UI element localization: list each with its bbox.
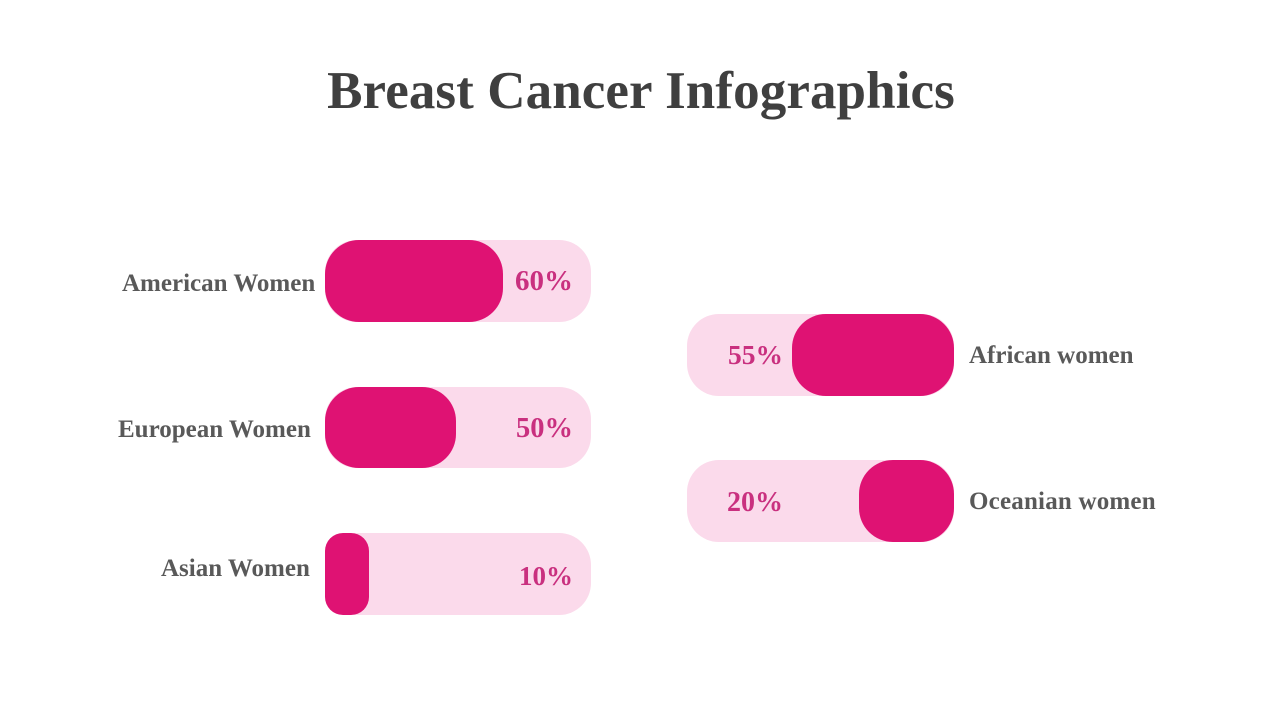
bar track — [325, 240, 591, 322]
bar fill 50% — [325, 387, 456, 468]
bar fill 55% — [792, 314, 954, 396]
panel: African women bar — [687, 314, 1134, 396]
value 50%: 50% — [516, 413, 573, 444]
panel: American Women bar — [122, 240, 591, 322]
bar track — [687, 460, 954, 542]
bar track — [325, 533, 591, 615]
title: Breast Cancer Infographics — [327, 62, 955, 120]
label: Oceanian women: Oceanian women — [969, 488, 1156, 515]
value 10%: 10% — [519, 561, 573, 591]
label: American Women: American Women — [122, 270, 315, 297]
bar track — [687, 314, 954, 396]
label: Asian Women: Asian Women — [161, 555, 310, 582]
value 20%: 20% — [727, 487, 783, 518]
panel: Oceanian women bar — [687, 460, 1156, 542]
value 55%: 55% — [728, 339, 783, 370]
panel: Asian Women bar — [161, 533, 591, 615]
label: African women: African women — [969, 342, 1134, 369]
panel: European Women bar — [118, 387, 591, 468]
value 60%: 60% — [515, 265, 573, 297]
bar track — [325, 387, 591, 468]
bar fill 60% — [325, 240, 503, 322]
bar fill 20% — [859, 460, 954, 542]
label: European Women: European Women — [118, 416, 311, 443]
bar fill 10% — [325, 533, 369, 615]
